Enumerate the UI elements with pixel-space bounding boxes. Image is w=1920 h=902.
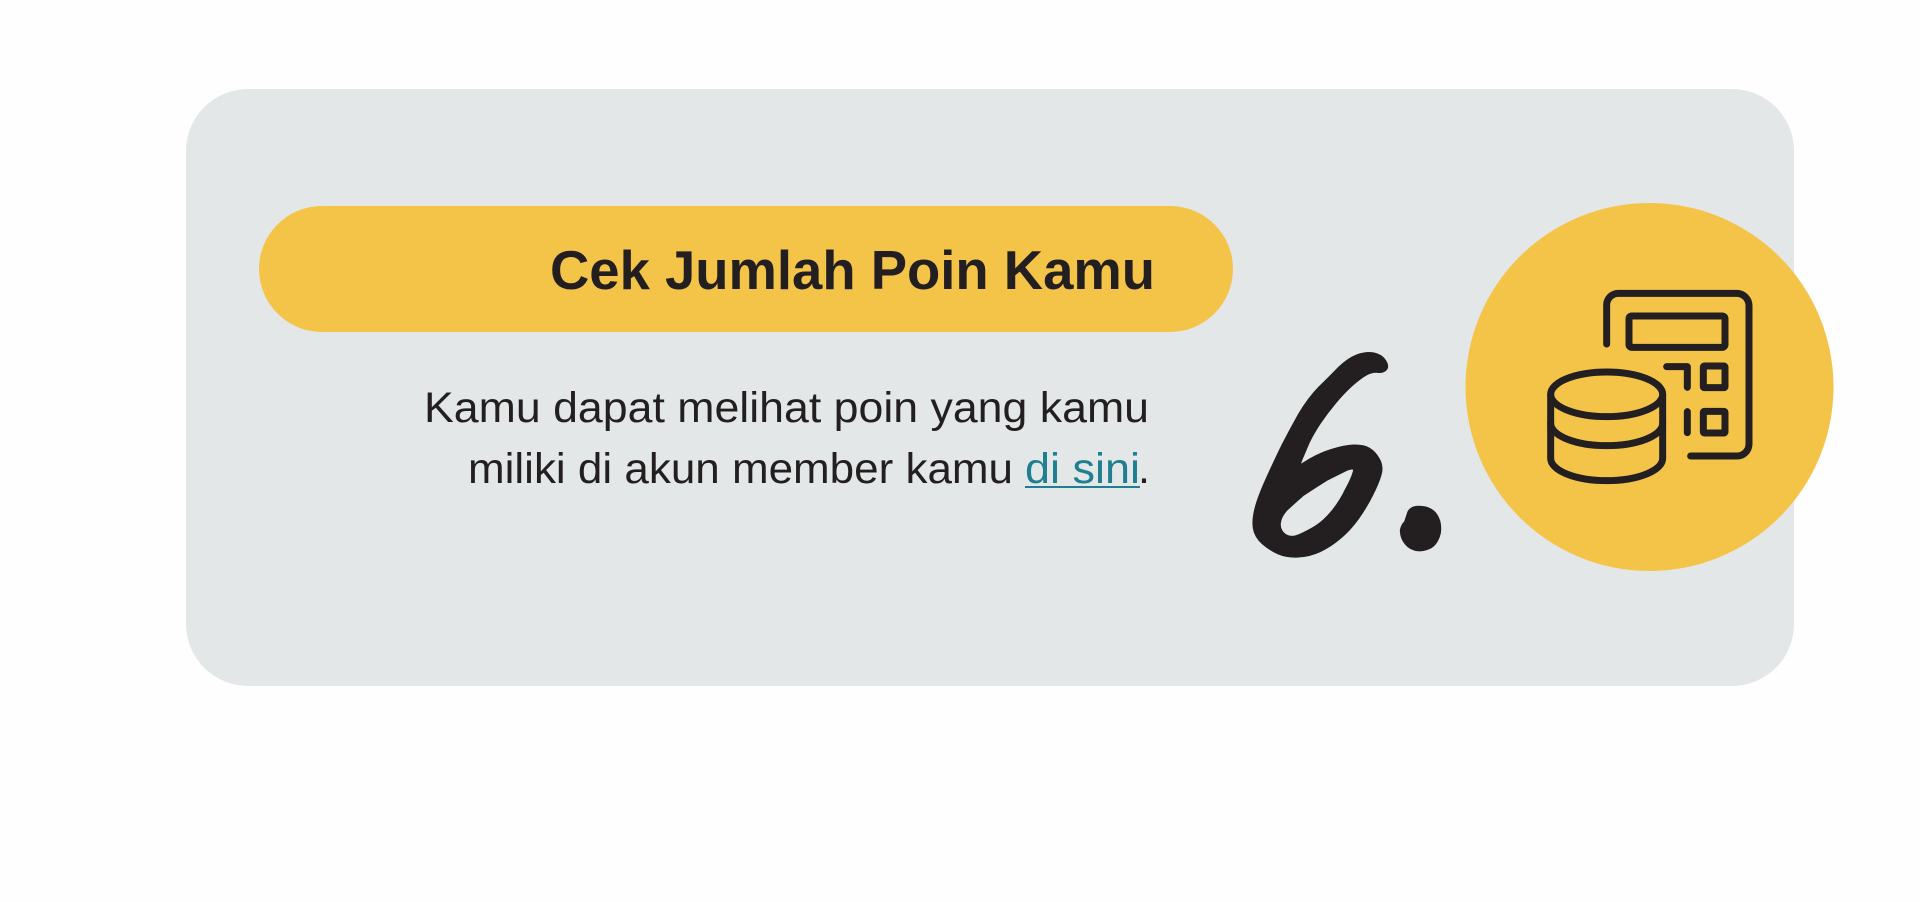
- icon circle: [1466, 203, 1834, 571]
- panel: grey card: [186, 89, 1794, 686]
- body text: [424, 384, 1150, 493]
- heading pill: [259, 206, 1233, 332]
- icon: calculator and coins: [1551, 293, 1749, 481]
- link: di sini: di sini: [1025, 445, 1140, 493]
- heading text: Cek Jumlah Poin Kamu: [550, 239, 1155, 301]
- step number: 6.: [1253, 353, 1440, 557]
- body text: .: [1138, 445, 1150, 493]
- body text: miliki di akun member kamu: [468, 445, 1013, 493]
- body text: Kamu dapat melihat poin yang kamu: [424, 384, 1149, 432]
